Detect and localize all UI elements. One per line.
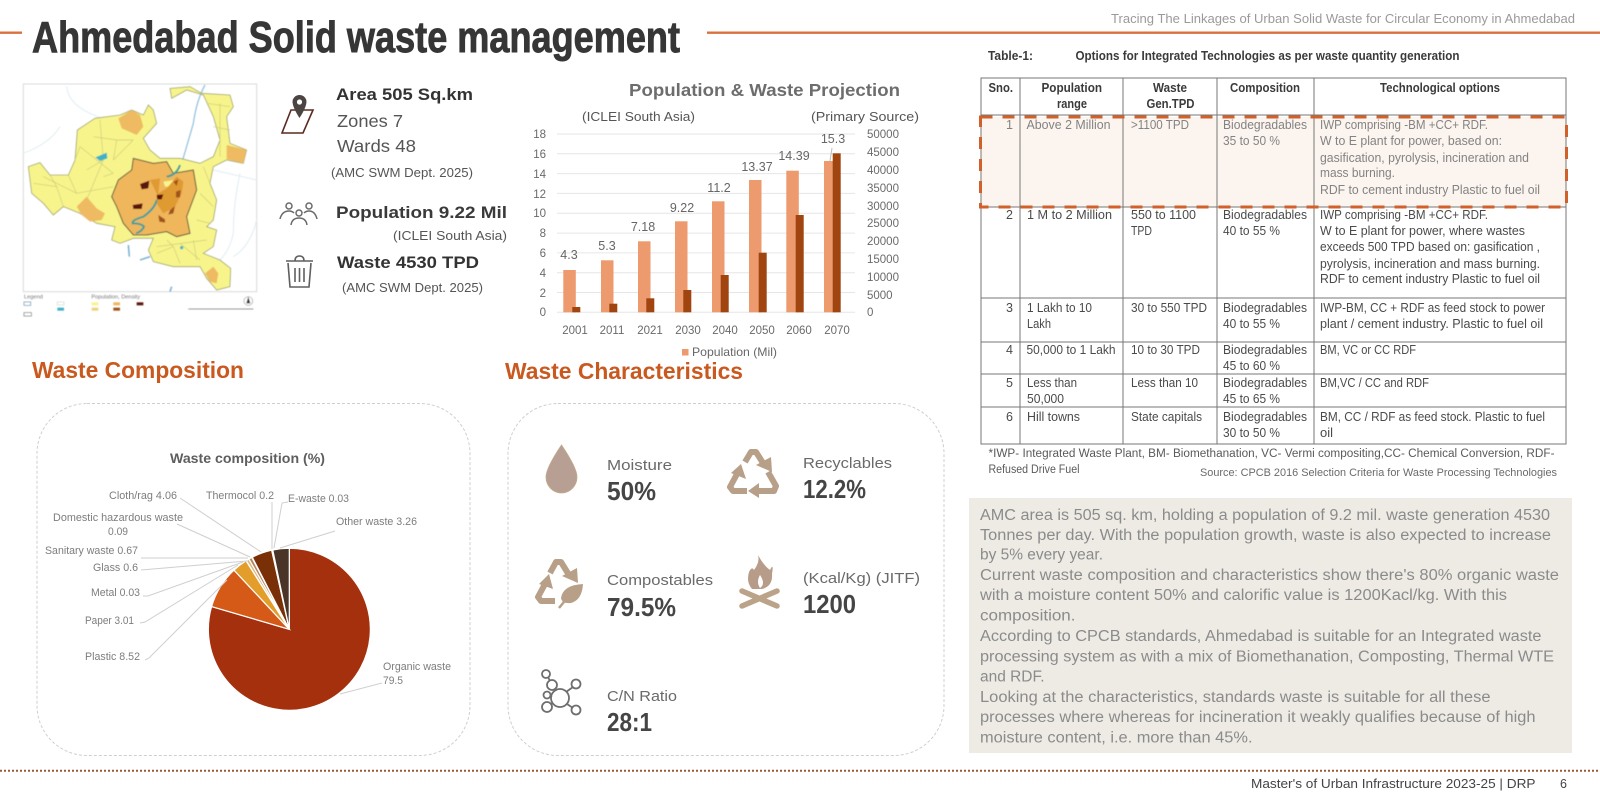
- category labels: 2030: [675, 325, 701, 337]
- row 5: 5: [1006, 376, 1013, 390]
- row 3: Biodegradables: [1223, 301, 1307, 315]
- compostables metric: [538, 562, 713, 622]
- text block: summary: composition.: [980, 608, 1076, 624]
- table header: Technological options: [1380, 81, 1500, 95]
- table: integrated technology options: [980, 78, 1566, 444]
- chart title: Population & Waste Projection: [629, 80, 900, 100]
- table header: Composition: [1230, 81, 1300, 95]
- text block: summary: According to CPCB standards, Ahmedabad is suitable for an Integrated waste: [980, 628, 1542, 645]
- category labels: 2001: [562, 325, 588, 337]
- icon: people: [280, 203, 317, 225]
- map: population density of Ahmedabad: Legend: [24, 295, 43, 301]
- right axis source: (Primary Source): [811, 110, 919, 124]
- row 6: 30 to 50 %: [1223, 426, 1280, 440]
- table header: [988, 81, 1500, 111]
- left axis labels: 10: [533, 208, 546, 220]
- area text block: (AMC SWM Dept. 2025): [331, 166, 473, 180]
- row 2: RDF to cement industry Plastic to fuel oil: [1320, 272, 1540, 286]
- category labels: 2050: [749, 325, 775, 337]
- row 2: 550 to 1100: [1131, 208, 1196, 222]
- recyclables metric: Recyclables: [803, 456, 892, 472]
- bar chart: population and waste projection: [533, 80, 919, 359]
- population text block: Population 9.22 Mil: [336, 203, 507, 222]
- bar value labels: 14.39: [778, 149, 810, 163]
- pie chart: [208, 548, 370, 710]
- right axis labels: 15000: [867, 254, 899, 266]
- bar value labels: 9.22: [670, 201, 694, 215]
- row 3: 40 to 55 %: [1223, 317, 1280, 331]
- row 5: 50,000: [1027, 392, 1064, 406]
- category labels: [562, 325, 850, 337]
- row 1: [1006, 118, 1540, 197]
- pie labels: E-waste 0.03: [288, 493, 349, 505]
- area text block: [331, 85, 473, 180]
- table caption: Options for Integrated Technologies as per waste quantity generation: [1076, 49, 1460, 63]
- bar value labels: [560, 132, 845, 262]
- row 2: 1 M to 2 Million: [1027, 208, 1112, 222]
- callout: dashed highlight on row 1: [980, 117, 1566, 207]
- row 2: Biodegradables: [1223, 208, 1307, 222]
- pie labels: Domestic hazardous waste: [53, 512, 183, 524]
- pie labels: Metal 0.03: [91, 587, 140, 599]
- pie labels: [45, 490, 451, 687]
- right axis labels: 0: [867, 307, 873, 319]
- left axis labels: 12: [533, 189, 546, 201]
- row 4: 10 to 30 TPD: [1131, 343, 1200, 357]
- row 3: 3: [1006, 301, 1013, 315]
- row 4: BM, VC or CC RDF: [1320, 343, 1416, 357]
- row 1: mass burning.: [1320, 166, 1395, 180]
- table header: Sno.: [988, 81, 1013, 95]
- row 1: W to E plant for power, based on:: [1320, 134, 1502, 148]
- category labels: 2040: [712, 325, 738, 337]
- row 5: Less than 10: [1131, 376, 1198, 390]
- bar value labels: 7.18: [631, 220, 655, 234]
- row 1: 35 to 50 %: [1223, 134, 1280, 148]
- moisture metric: [546, 445, 672, 506]
- pie labels: Glass 0.6: [93, 562, 138, 574]
- pie leader lines: [140, 498, 382, 694]
- row 3: plant / cement industry. Plastic to fuel oil: [1320, 317, 1543, 331]
- left axis labels: 8: [540, 228, 546, 240]
- category labels: 2021: [637, 325, 663, 337]
- left axis labels: 4: [540, 268, 547, 280]
- text block: summary: by 5% every year.: [980, 546, 1103, 564]
- text block: summary: processing system as with a mix of Biomethanation, Composting, Thermal WTE: [980, 648, 1554, 666]
- right axis labels: 50000: [867, 129, 899, 141]
- footer: 6: [1560, 777, 1567, 791]
- icon: trash bin: [286, 256, 313, 287]
- C/N ratio metric: 28:1: [607, 707, 652, 737]
- compostables metric: Compostables: [607, 573, 713, 589]
- category labels: 2070: [824, 325, 850, 337]
- row 6: oil: [1320, 426, 1333, 440]
- row 1: Biodegradables: [1223, 118, 1307, 132]
- population bars: [563, 161, 836, 312]
- row 5: 45 to 65 %: [1223, 392, 1280, 406]
- calorific value metric: 1200: [803, 589, 856, 619]
- table footnote: *IWP- Integrated Waste Plant, BM- Biomethanation, VC- Vermi compositing,CC- Chemical Conversion, RDF-: [988, 448, 1555, 460]
- moisture metric: Moisture: [607, 458, 672, 474]
- C/N ratio metric: [542, 670, 677, 737]
- pie labels: Organic waste: [383, 661, 451, 673]
- row 2: exceeds 500 TPD based on: gasification ,: [1320, 240, 1540, 254]
- row 1: gasification, pyrolysis, incineration and: [1320, 151, 1529, 165]
- row 2: [1006, 208, 1540, 286]
- category labels: 2060: [786, 325, 812, 337]
- row 5: Less than: [1027, 376, 1077, 390]
- row 3: IWP-BM, CC + RDF as feed stock to power: [1320, 301, 1545, 315]
- row 1: >1100 TPD: [1131, 118, 1189, 132]
- population text block: [336, 203, 507, 243]
- waste text block: (AMC SWM Dept. 2025): [342, 281, 483, 295]
- right axis labels: 45000: [867, 147, 899, 159]
- waste bars: [572, 153, 841, 312]
- row 2: W to E plant for power, where wastes: [1320, 224, 1525, 238]
- right axis labels: 10000: [867, 272, 899, 284]
- row 3: [1006, 301, 1545, 331]
- row 2: 40 to 55 %: [1223, 224, 1280, 238]
- icon: map pin: [282, 95, 313, 133]
- row 2: TPD: [1131, 224, 1152, 238]
- left axis labels: 2: [540, 288, 546, 300]
- footer: Master's of Urban Infrastructure 2023-25 | DRP: [1251, 777, 1536, 791]
- pie labels: 79.5: [383, 675, 403, 687]
- row 1: 1: [1006, 118, 1013, 132]
- row 4: 50,000 to 1 Lakh: [1026, 343, 1116, 357]
- table header: Waste: [1153, 81, 1187, 95]
- table footnote: Source: CPCB 2016 Selection Criteria for Waste Processing Technologies: [1200, 467, 1557, 479]
- row 5: BM,VC / CC and RDF: [1320, 376, 1429, 390]
- right axis labels: [867, 129, 899, 319]
- row 4: [1006, 343, 1416, 373]
- right axis labels: 30000: [867, 201, 899, 213]
- C/N ratio metric: C/N Ratio: [607, 689, 677, 705]
- row 1: Above 2 Million: [1026, 118, 1111, 132]
- text block: summary: Looking at the characteristics, standards waste is suitable for all these: [980, 689, 1490, 706]
- left axis labels: [533, 129, 547, 319]
- row 3: Lakh: [1027, 317, 1051, 331]
- calorific value metric: (Kcal/Kg) (JITF): [803, 571, 920, 587]
- bar value labels: 4.3: [560, 248, 578, 262]
- area text block: Wards 48: [337, 136, 416, 156]
- map: population density of Ahmedabad: Population, Density: [91, 295, 140, 301]
- bar value labels: 15.3: [821, 132, 845, 146]
- row 4: 4: [1006, 343, 1013, 357]
- text block: summary: Tonnes per day. With the population growth, waste is also expected to increase: [980, 527, 1551, 544]
- table footnote: [988, 448, 1557, 479]
- row 3: 30 to 550 TPD: [1131, 301, 1207, 315]
- heading: waste composition: Waste Composition: [32, 357, 244, 383]
- title: Ahmedabad Solid waste management: [32, 13, 680, 62]
- bar value labels: 13.37: [741, 160, 773, 174]
- left axis labels: 0: [540, 307, 546, 319]
- left axis labels: 6: [540, 248, 546, 260]
- left axis labels: 18: [533, 129, 546, 141]
- pie labels: Thermocol 0.2: [206, 490, 274, 502]
- row 6: BM, CC / RDF as feed stock. Plastic to fuel: [1320, 410, 1545, 424]
- recyclables metric: 12.2%: [803, 474, 866, 504]
- map: population density of Ahmedabad: [23, 84, 257, 316]
- waste text block: Waste 4530 TPD: [337, 253, 479, 272]
- right axis labels: 20000: [867, 236, 899, 248]
- row 5: Biodegradables: [1223, 376, 1307, 390]
- row 6: State capitals: [1131, 410, 1202, 424]
- row 2: pyrolysis, incineration and mass burning.: [1320, 257, 1540, 271]
- report subtitle: Tracing The Linkages of Urban Solid Waste for Circular Economy in Ahmedabad: [1111, 12, 1575, 26]
- left axis labels: 14: [533, 169, 547, 181]
- area text block: Area 505 Sq.km: [336, 85, 473, 104]
- pie labels: Sanitary waste 0.67: [45, 545, 138, 557]
- text block: summary: with a moisture content 50% and calorific value is 1200Kacl/kg. With this: [979, 587, 1507, 604]
- table header: range: [1057, 97, 1087, 111]
- population text block: (ICLEI South Asia): [393, 229, 507, 243]
- bar value labels: 11.2: [707, 181, 731, 195]
- left axis labels: 16: [533, 149, 546, 161]
- right axis labels: 25000: [867, 218, 899, 230]
- text block: summary: [969, 498, 1572, 753]
- heading: waste characteristics: Waste Characteristics: [505, 358, 743, 384]
- chart legend: Population (Mil): [692, 345, 777, 359]
- row 6: Hill towns: [1027, 410, 1080, 424]
- row 3: 1 Lakh to 10: [1027, 301, 1092, 315]
- table caption: Table-1:: [988, 49, 1033, 63]
- table footnote: Refused Drive Fuel: [988, 464, 1080, 476]
- table header: Population: [1042, 81, 1102, 95]
- panel: waste composition pie: [37, 404, 470, 756]
- right axis labels: 35000: [867, 183, 899, 195]
- row 6: 6: [1006, 410, 1013, 424]
- row 2: IWP comprising -BM +CC+ RDF.: [1320, 208, 1488, 222]
- pie title: Waste composition (%): [170, 451, 325, 466]
- pie labels: 0.09: [108, 526, 128, 538]
- pie labels: Paper 3.01: [85, 615, 134, 627]
- waste text block: [337, 253, 483, 295]
- category labels: 2011: [600, 325, 624, 337]
- calorific value metric: [742, 555, 920, 619]
- text block: summary: processes where whereas for incineration it weakly qualifies because of high: [980, 709, 1536, 726]
- highlight fill: row 1: [981, 117, 1566, 207]
- moisture metric: 50%: [607, 476, 656, 506]
- row 2: 2: [1006, 208, 1013, 222]
- right axis labels: 40000: [867, 165, 899, 177]
- compostables metric: 79.5%: [607, 592, 676, 622]
- table header: Gen.TPD: [1146, 97, 1194, 111]
- right axis labels: 5000: [867, 290, 893, 302]
- text block: summary: and RDF.: [980, 668, 1044, 686]
- row 5: [1006, 376, 1429, 406]
- header rules: [0, 32, 1600, 34]
- pie labels: Cloth/rag 4.06: [109, 490, 177, 502]
- bar value labels: 5.3: [598, 239, 616, 253]
- text block: summary: Current waste composition and characteristics show there's 80% organic waste: [980, 567, 1559, 584]
- pie labels: Other waste 3.26: [336, 516, 417, 528]
- row 1: RDF to cement industry Plastic to fuel oil: [1320, 183, 1540, 197]
- left axis source: (ICLEI South Asia): [582, 110, 695, 124]
- row 1: IWP comprising -BM +CC+ RDF.: [1320, 118, 1488, 132]
- recyclables metric: [730, 452, 892, 504]
- row 4: Biodegradables: [1223, 343, 1307, 357]
- row 6: Biodegradables: [1223, 410, 1307, 424]
- row 4: 45 to 60 %: [1223, 359, 1280, 373]
- text block: summary: moisture content, i.e. more than 45%.: [980, 730, 1252, 746]
- panel: waste characteristics: [508, 404, 944, 756]
- area text block: Zones 7: [337, 111, 403, 131]
- row 6: [1006, 410, 1545, 440]
- pie labels: Plastic 8.52: [85, 651, 140, 663]
- text block: summary: AMC area is 505 sq. km, holding a population of 9.2 mil. waste generation 4530: [980, 507, 1550, 524]
